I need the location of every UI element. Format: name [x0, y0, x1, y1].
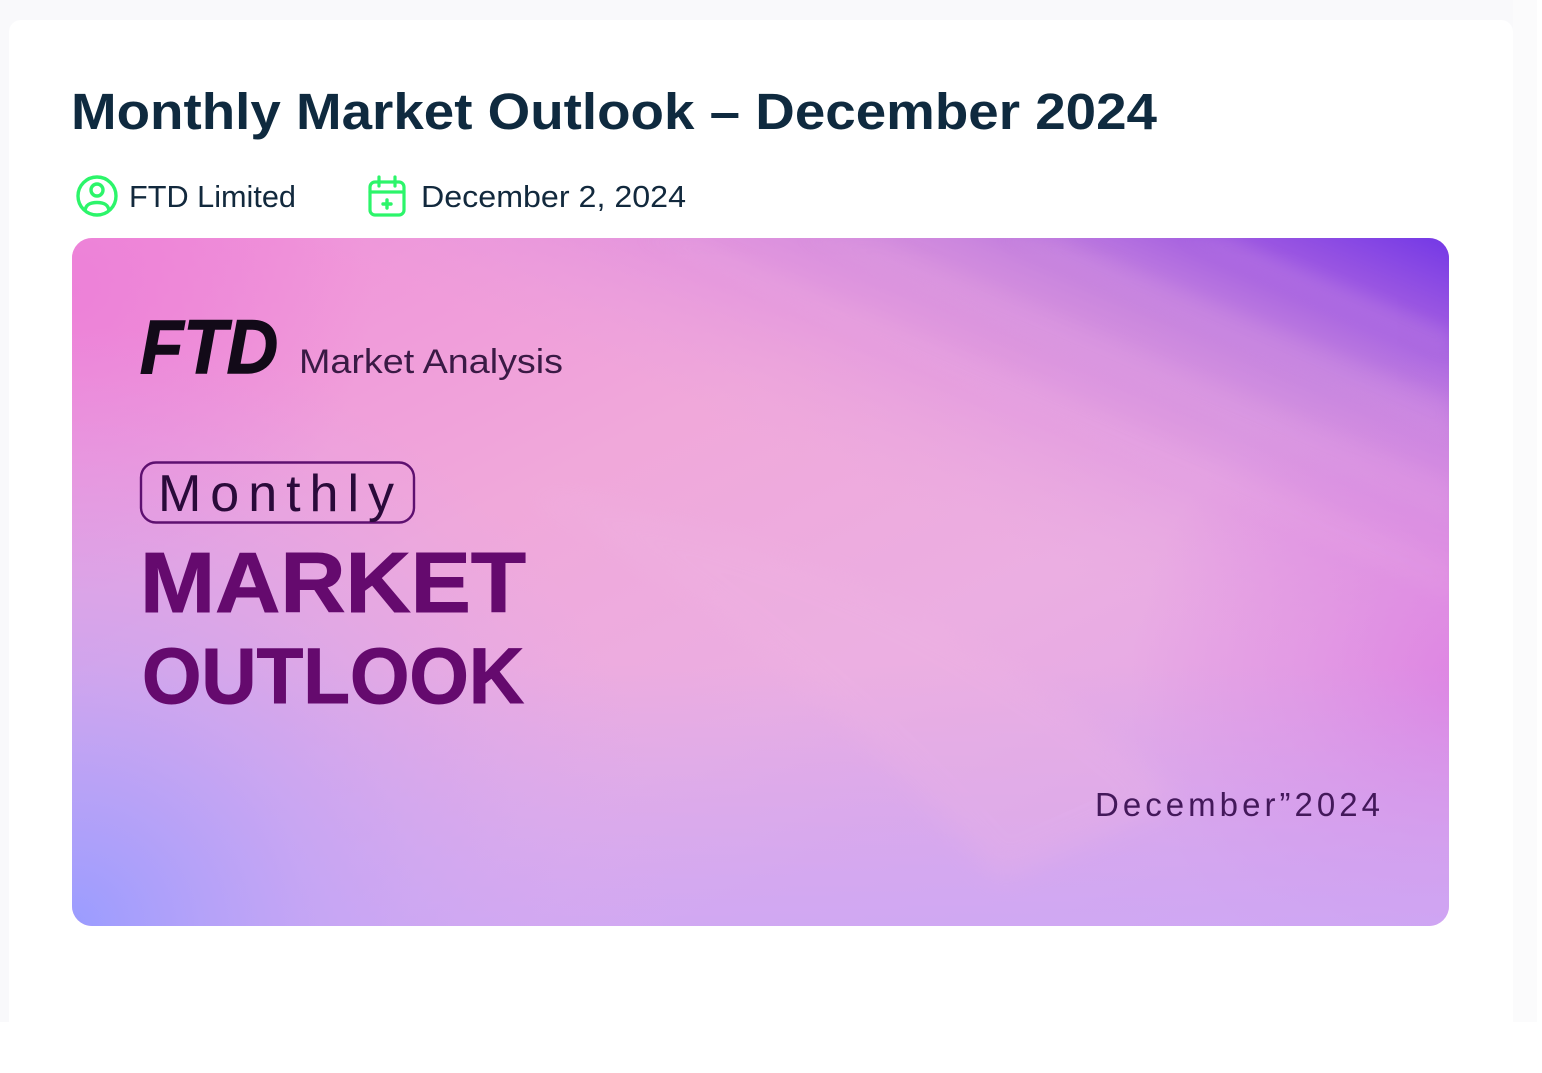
- icon: calendar: [370, 177, 404, 215]
- heading: MARKET: MARKET: [140, 536, 526, 631]
- logo tagline: Market Analysis: [299, 343, 563, 381]
- hero banner: [72, 238, 1449, 926]
- banner gradient background: [72, 238, 1449, 926]
- badge: Monthly: Monthly: [158, 465, 394, 523]
- publication date: December 2, 2024: [421, 179, 686, 214]
- logo: FTD: FTD: [140, 305, 278, 390]
- icon: user: [78, 177, 116, 215]
- card shadow right edge: [1513, 0, 1537, 1022]
- heading: OUTLOOK: OUTLOOK: [142, 631, 524, 720]
- banner date: December”2024: [1095, 786, 1380, 823]
- title: Monthly Market Outlook – December 2024: [71, 83, 1158, 140]
- author meta row: [78, 177, 296, 215]
- date meta row: [370, 177, 686, 215]
- author name: FTD Limited: [129, 179, 296, 214]
